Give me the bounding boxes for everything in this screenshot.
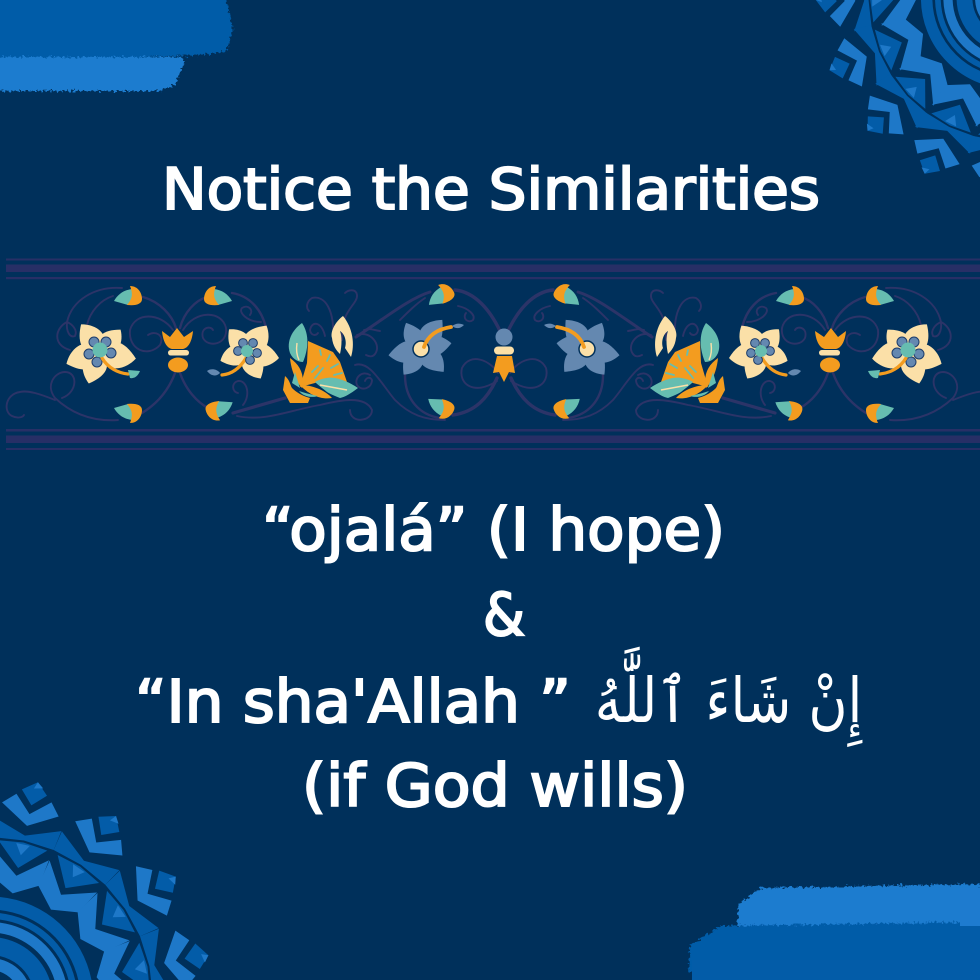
central tassel: [493, 328, 515, 382]
main text block: [135, 495, 863, 820]
mandala rings: [0, 897, 92, 980]
line: In sha'Allah: “In sha'Allah ”: [135, 667, 571, 736]
floral ornament: left half: [7, 280, 500, 423]
title: Notice the Similarities: [162, 157, 820, 223]
line: ampersand: &: [483, 580, 525, 649]
line: Arabic phrase: إِنْ شَاءَ ٱللَّٰهُ: [595, 645, 863, 747]
band stripes: bottom: [6, 429, 980, 450]
ornamental band: [6, 258, 980, 450]
band stripes: top: [6, 258, 980, 279]
line: if God wills: (if God wills): [302, 751, 688, 820]
mandala wedges: [0, 774, 208, 980]
brush stroke: top left: [0, 0, 233, 91]
mandala: bottom left corner: [0, 774, 208, 980]
brush stroke: bottom right: [688, 884, 980, 980]
floral ornament: right half: [508, 280, 980, 423]
line: ojala: “ojalá” (I hope): [262, 495, 725, 564]
mandala: top right corner: [815, 0, 980, 196]
